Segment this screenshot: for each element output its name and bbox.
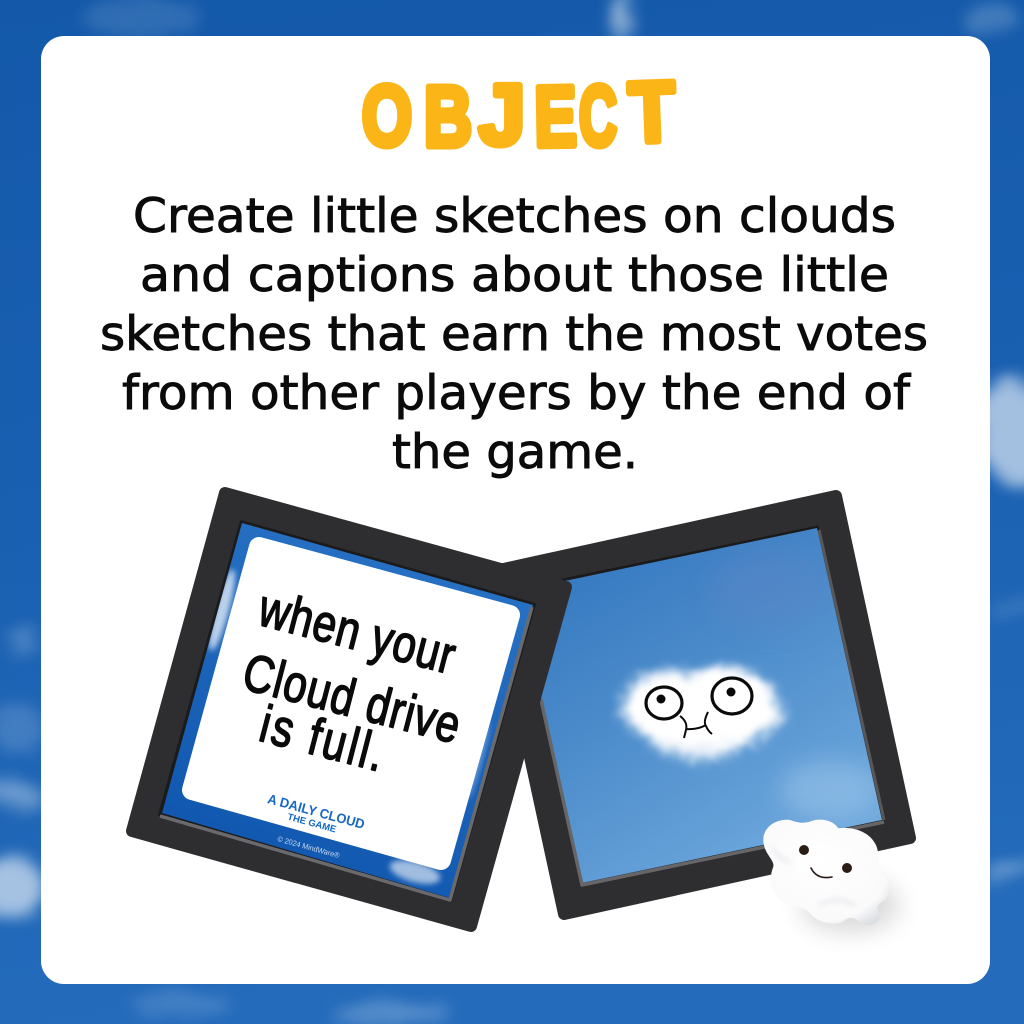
handwritten caption: is full. — [254, 695, 391, 783]
game logo: THE GAME — [286, 812, 337, 835]
cloud game piece — [763, 820, 900, 933]
piece left eye — [799, 845, 809, 855]
title: OBJECT: T — [627, 64, 677, 161]
game logo: A DAILY CLOUD — [266, 791, 367, 832]
left tile: caption card in black frame — [132, 493, 566, 926]
title: OBJECT: E — [534, 69, 577, 165]
piece shadow — [800, 877, 900, 933]
handwritten caption — [237, 579, 467, 783]
piece right eye — [842, 863, 852, 873]
handwritten caption: Cloud drive — [237, 643, 467, 755]
title: OBJECT: O — [362, 69, 412, 164]
objective text: Create little sketches on clouds — [133, 189, 896, 244]
title: OBJECT: J — [479, 68, 525, 163]
sky picture — [541, 528, 882, 883]
right tile recess — [515, 526, 884, 885]
drawn-on cloud — [622, 668, 784, 758]
recess highlight — [160, 607, 532, 900]
title: OBJECT — [362, 64, 677, 165]
objective text — [100, 189, 928, 480]
recess right edge — [819, 530, 884, 820]
title: OBJECT: B — [424, 70, 472, 165]
recess highlight — [541, 700, 884, 885]
title: OBJECT: C — [579, 69, 617, 164]
piece gloss shading — [772, 848, 855, 905]
objective text: the game. — [392, 425, 638, 480]
piece body — [763, 820, 889, 925]
right eye — [712, 678, 752, 714]
left tile recess — [159, 521, 535, 901]
white card face — [192, 547, 510, 860]
left tile frame — [132, 493, 566, 926]
piece smile — [811, 868, 832, 878]
right tile: cloud picture in black frame — [480, 496, 910, 914]
objective text: from other players by the end of — [122, 366, 911, 421]
copyright: © 2024 MindWare® — [276, 834, 341, 860]
left eye — [646, 687, 682, 719]
handwritten caption: when your — [252, 579, 461, 686]
objective text: sketches that earn the most votes — [100, 307, 928, 362]
card background — [162, 523, 533, 898]
mouth — [680, 712, 712, 738]
objective text: and captions about those little — [140, 248, 889, 303]
right tile frame — [490, 496, 910, 914]
